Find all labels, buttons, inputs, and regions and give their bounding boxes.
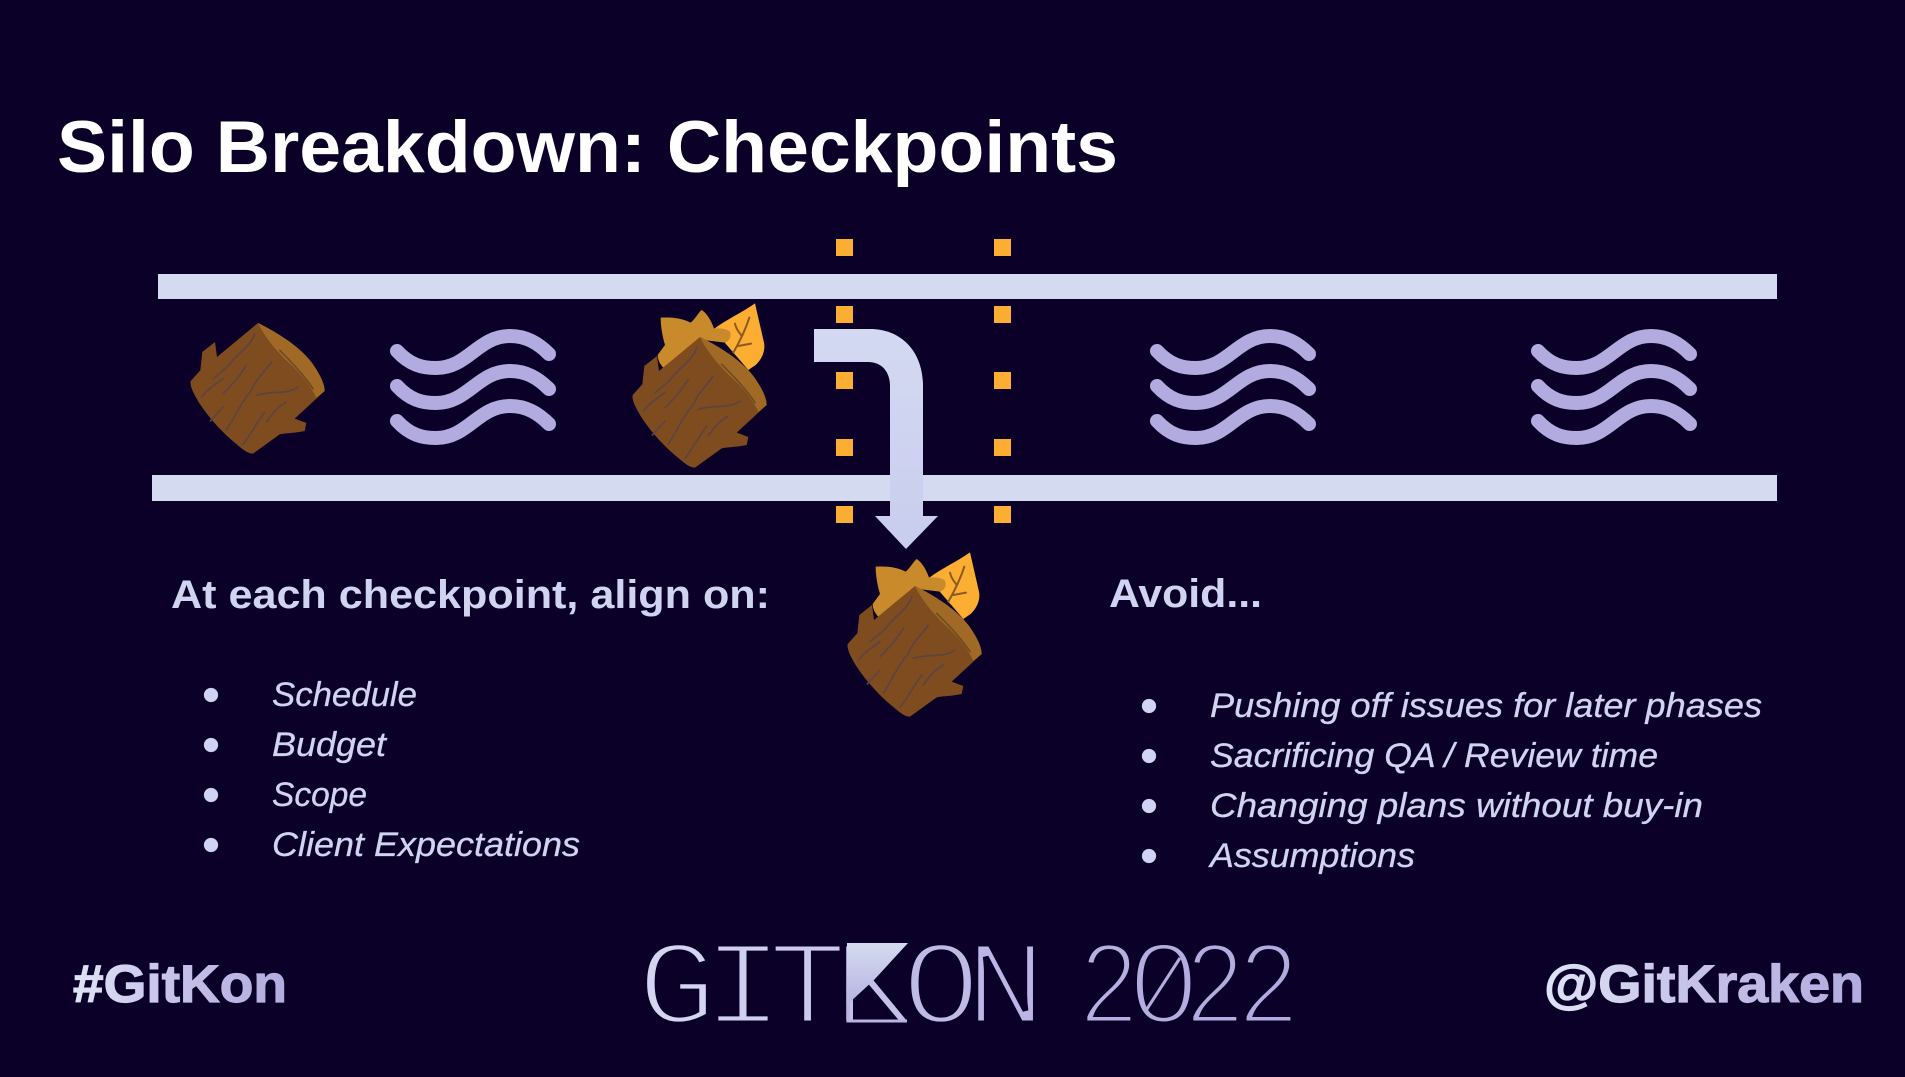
list: avoid items: Sacrificing QA / Review time: [1210, 737, 1658, 775]
icon: log with leaves: [633, 303, 767, 468]
heading: align: At each checkpoint, align on:: [171, 573, 770, 617]
list: align items: Schedule: [272, 676, 417, 714]
footer logo: GitKon 2022: 2: [1078, 923, 1140, 1060]
heading: avoid: Avoid...: [1109, 572, 1262, 616]
footer logo: GitKon 2022: O: [902, 923, 980, 1059]
footer logo: GitKon 2022: [637, 923, 1300, 1060]
footer logo: GitKon 2022: T: [768, 923, 847, 1059]
list: align items: Budget: [272, 726, 388, 764]
list: align items: [204, 676, 580, 864]
footer logo: GitKon 2022: G: [637, 924, 717, 1060]
icon: log: [191, 323, 325, 454]
list: avoid items: [1142, 687, 1762, 875]
title: Silo Breakdown: Checkpoints: [57, 107, 1118, 188]
list: avoid items: Pushing off issues for later phases: [1210, 687, 1762, 725]
river bottom bank: [152, 475, 1777, 501]
footer logo: GitKon 2022: I: [702, 923, 784, 1059]
footer logo: GitKon 2022: 2: [1237, 923, 1300, 1059]
list: avoid items: Assumptions: [1208, 837, 1415, 875]
footer hashtag: #GitKon: [73, 955, 287, 1014]
icon: water waves 2: [1157, 336, 1309, 438]
right checkpoint dotted line: [994, 239, 1011, 523]
text block: avoid: [1109, 572, 1762, 875]
icon: water waves 1: [397, 336, 549, 438]
river diagram: [152, 239, 1777, 717]
left checkpoint dotted line: [836, 239, 853, 523]
footer logo: GitKon 2022: 0: [1127, 924, 1200, 1060]
list: align items: Scope: [272, 776, 367, 814]
footer logo: GitKon 2022: K: [833, 923, 913, 1059]
river top bank: [158, 274, 1777, 299]
icon: water waves 3: [1538, 336, 1690, 438]
list: avoid items: Changing plans without buy-in: [1210, 787, 1703, 825]
footer logo: GitKon 2022: 2: [1184, 923, 1246, 1060]
text block: at each checkpoint: [171, 573, 770, 864]
footer handle: @GitKraken: [1544, 955, 1864, 1014]
icon: log with leaves removed from river: [848, 552, 982, 717]
list: align items: Client Expectations: [272, 826, 580, 864]
arrow: diverted out of the river: [814, 329, 938, 549]
footer logo: GitKon 2022: N: [965, 923, 1047, 1059]
